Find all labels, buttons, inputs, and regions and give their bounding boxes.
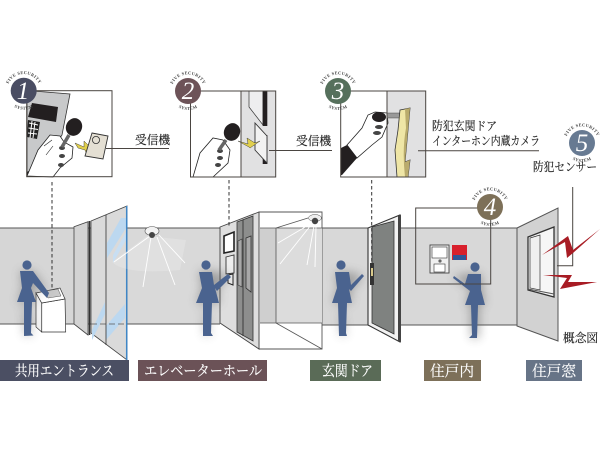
location label: unit window: 住戸窓 (532, 362, 577, 380)
location label: inside unit: 住戸内 (430, 363, 474, 380)
camera callout label: インターホン内蔵カメラ (432, 134, 540, 148)
elevator hall (220, 212, 322, 349)
location label: shared entrance: 共用エントランス (15, 363, 114, 380)
badge 2: FIVE SECURITY (170, 71, 206, 84)
badge 3: FIVE SECURITY (320, 71, 356, 84)
panel 1: key fob at entrance intercom (27, 91, 112, 177)
concept diagram note: 概念図 (563, 331, 598, 345)
badge 5 (564, 123, 600, 162)
badge 3 (320, 71, 356, 110)
badge 1 (6, 71, 42, 110)
location label: entrance door: 玄関ドア (322, 362, 373, 380)
badge 4: FIVE SECURITY (472, 187, 508, 200)
dashed leader lines (52, 180, 372, 290)
window wall (517, 208, 558, 341)
person 4 (453, 262, 485, 338)
location label: unit window (526, 360, 582, 381)
badge 2: SYSTEM (178, 105, 198, 110)
camera callout label (418, 119, 540, 151)
sensor connector line (557, 187, 573, 266)
connector and receiver label 1 (106, 133, 170, 148)
in-home intercom panel (430, 245, 449, 273)
badge 2: 2 (182, 78, 194, 105)
badge 5: 5 (576, 130, 588, 157)
panel 3: key fob at door handle (341, 91, 426, 177)
entrance door (368, 215, 401, 342)
badge 3: 3 (331, 78, 344, 105)
panel 4: in-home frame (416, 208, 491, 284)
badge 3: SYSTEM (328, 105, 348, 110)
entrance partition and glass door (74, 206, 127, 360)
scene: back walls (0, 228, 517, 325)
location label: elevator hall (138, 360, 267, 381)
badge 4 (472, 187, 508, 226)
badge 1: SYSTEM (14, 104, 32, 110)
lightning bolts (542, 229, 600, 289)
location label: shared entrance (0, 360, 129, 381)
person 1 (17, 260, 49, 336)
badge 4: 4 (484, 194, 496, 221)
connector and receiver label 2: 受信機 (296, 134, 331, 148)
person 2 (196, 260, 231, 336)
connector and receiver label 2 (269, 134, 332, 150)
security company sign (452, 245, 467, 260)
badge 5: SYSTEM (572, 157, 592, 162)
badge 5: FIVE SECURITY (564, 123, 600, 136)
location label: inside unit (424, 360, 481, 381)
panel 2: key fob at elevator (190, 91, 276, 177)
badge 1: 1 (17, 78, 29, 105)
connector and receiver label 1: 受信機 (135, 133, 170, 147)
camera callout label: 防犯玄関ドア (432, 119, 497, 133)
location label: entrance door (310, 360, 381, 381)
location label: elevator hall: エレベーターホール (144, 363, 262, 380)
badge 2 (170, 71, 206, 110)
ceiling camera 1 with rays (112, 226, 186, 287)
badge 1: FIVE SECURITY (6, 71, 42, 84)
kiosk: entrance intercom stand (36, 288, 66, 332)
ceiling camera 2 with rays (278, 214, 322, 267)
person 3 (332, 260, 364, 336)
badge 4: SYSTEM (480, 221, 500, 226)
